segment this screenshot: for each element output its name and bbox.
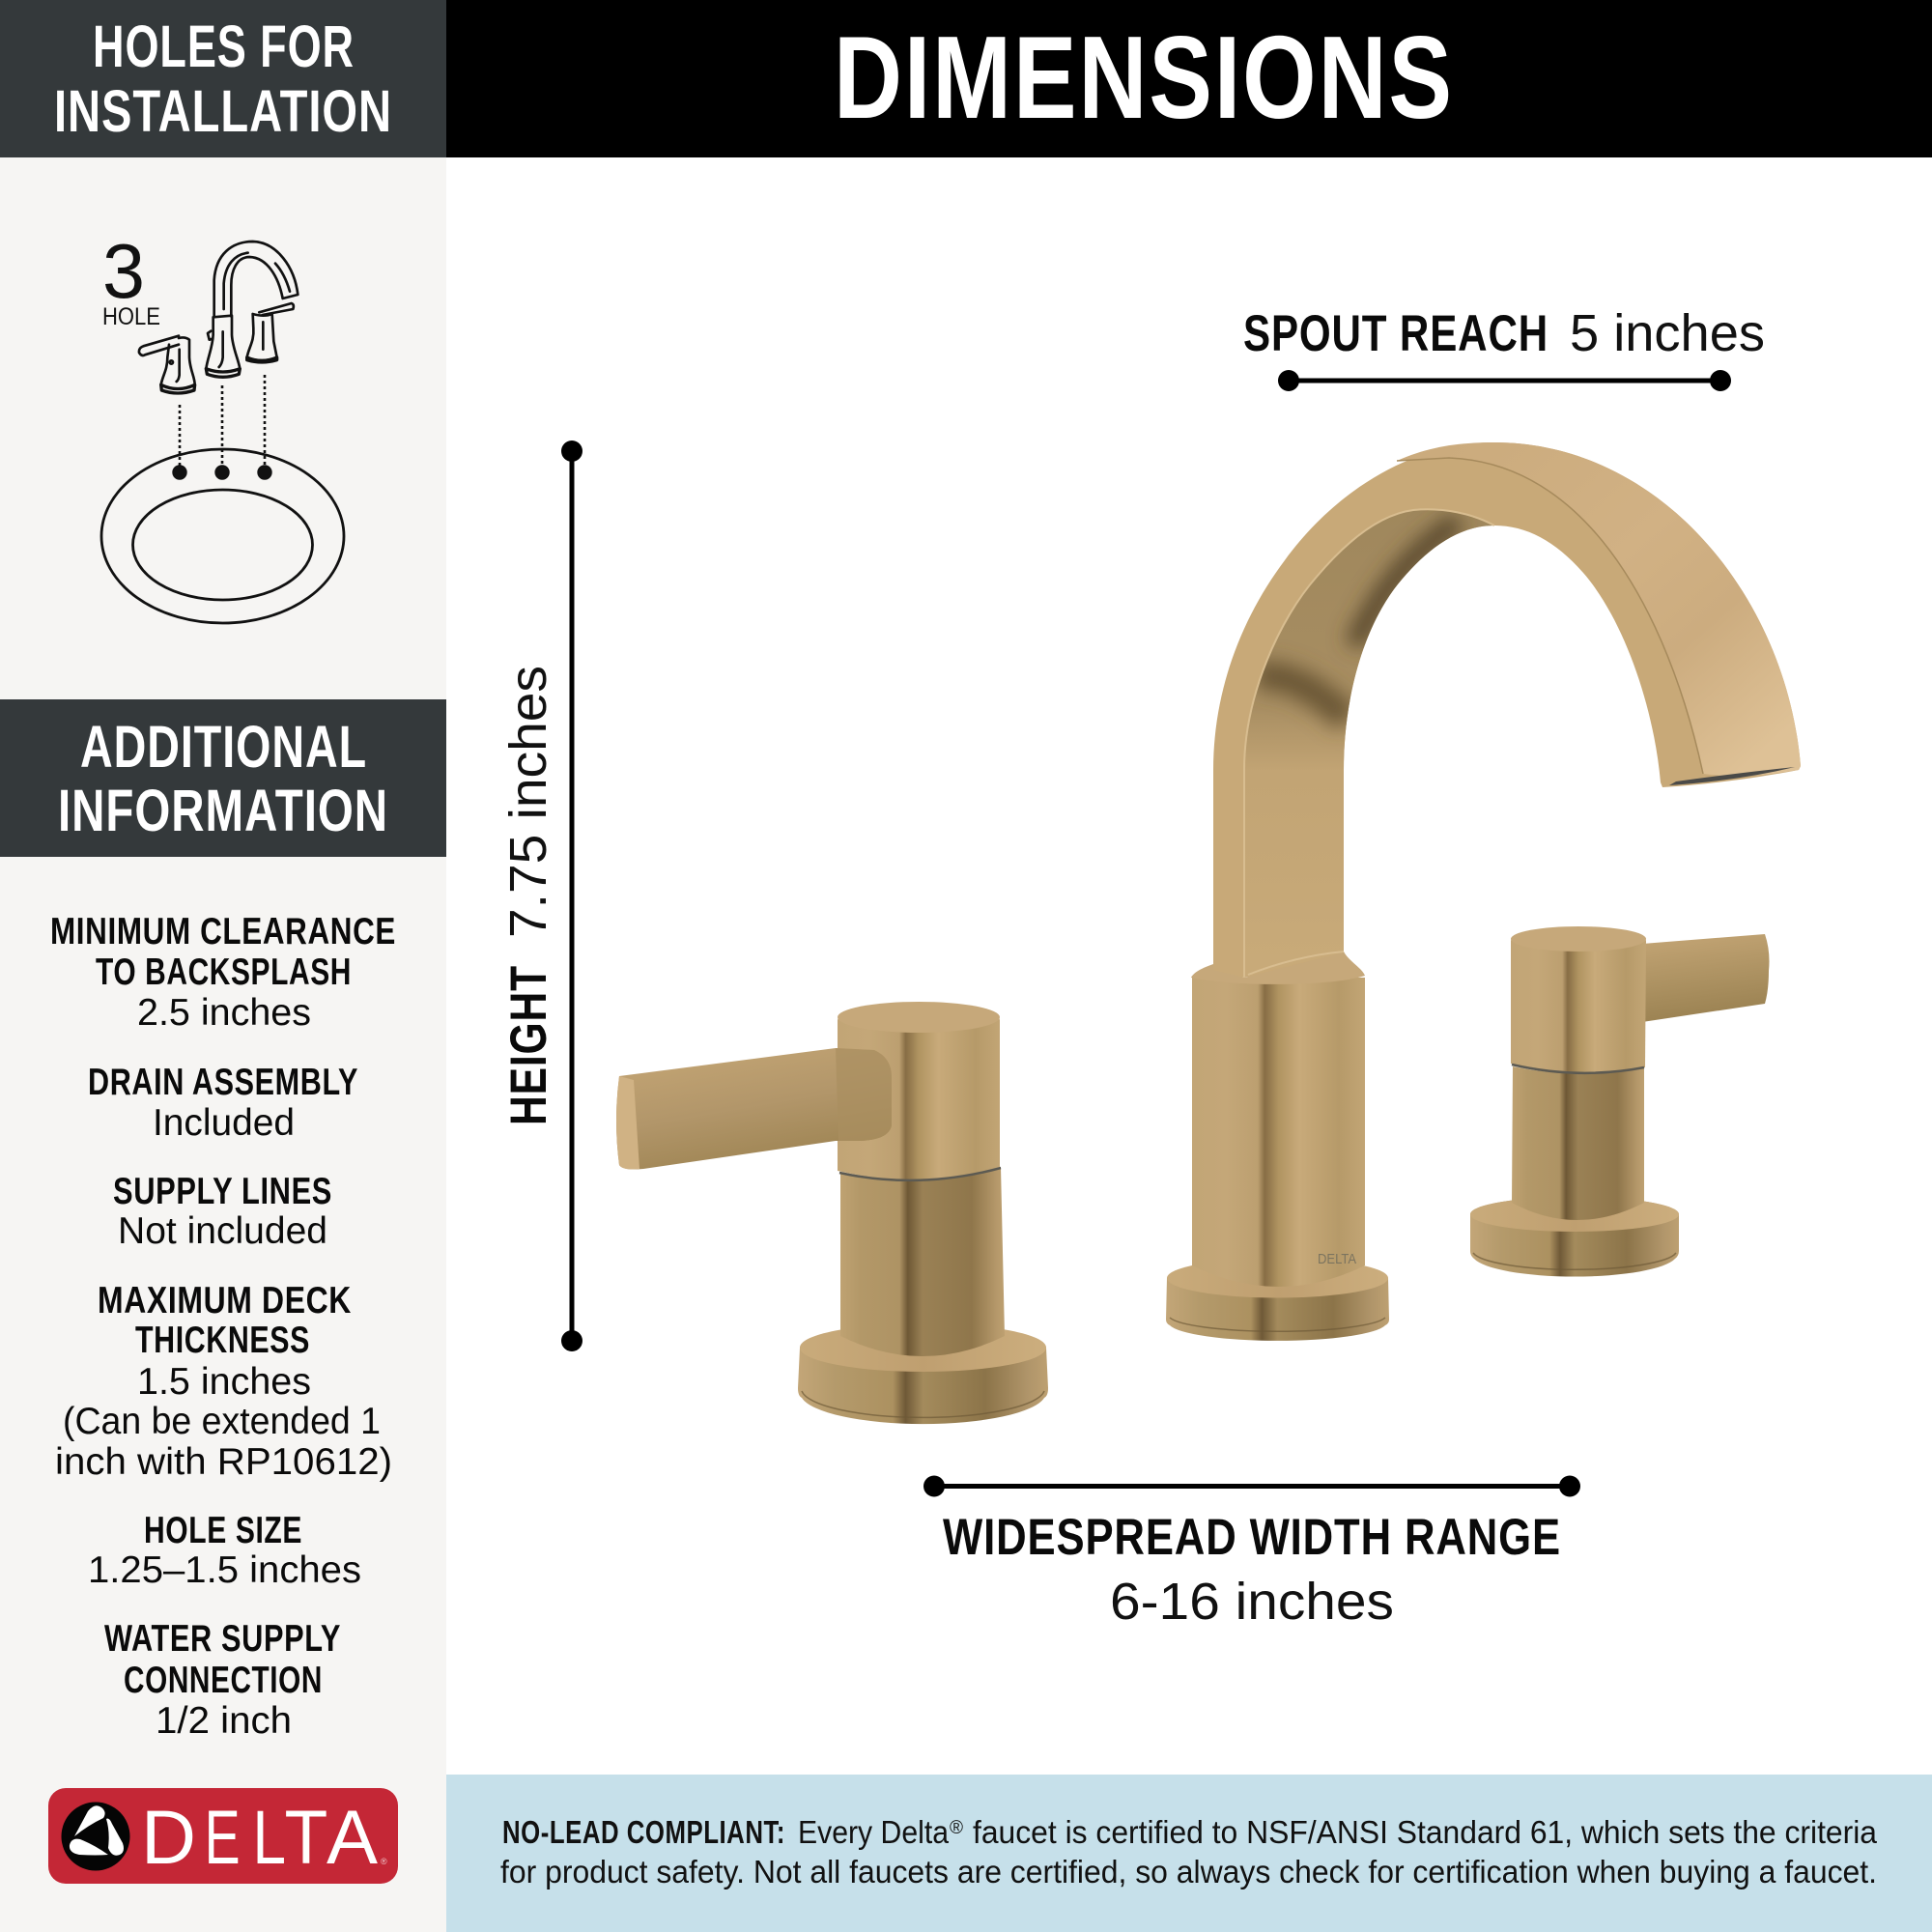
illustration: gold widespread faucet [616, 442, 1801, 1424]
faucet: left handle [616, 1002, 1048, 1424]
faucet: spout inner surface shading [1245, 510, 1493, 978]
faucet: center body shoulder [1191, 952, 1365, 984]
callout: no-lead compliant note: for product safety. Not all faucets are certified, so always check for certification when buying a faucet. [500, 1854, 1877, 1889]
spec: minimum clearance: MINIMUM CLEARANCE [50, 911, 396, 952]
arrow: spout reach dimension line [1278, 370, 1731, 391]
spec: maximum deck thickness: inch with RP10612) [55, 1441, 392, 1483]
logo: delta: ® [381, 1857, 387, 1866]
spec: maximum deck thickness: 1.5 inches [137, 1361, 311, 1403]
icon: small faucet line drawing [139, 242, 298, 393]
callout: no-lead compliant note: ® [950, 1818, 963, 1838]
sidebar background [0, 0, 446, 1932]
label: spout reach: 5 inches [1570, 304, 1765, 362]
label: 3 hole: 3 [102, 228, 145, 314]
label: spout reach: SPOUT REACH [1243, 305, 1548, 362]
spec: maximum deck thickness: THICKNESS [135, 1320, 310, 1361]
label: height: HEIGHT [500, 965, 557, 1125]
heading: holes for installation [0, 0, 446, 157]
wordmark: delta: L [253, 1794, 286, 1880]
spec: minimum clearance: TO BACKSPLASH [96, 952, 352, 993]
label: height [499, 666, 557, 1125]
spec: supply lines [113, 1171, 332, 1252]
spec: water supply connection: 1/2 inch [156, 1700, 292, 1742]
spec: maximum deck thickness: (Can be extended 1 [63, 1401, 381, 1442]
icon: 3 hole faucet and sink diagram [101, 228, 344, 623]
callout: no-lead compliant note: Every Delta [798, 1814, 950, 1850]
label: 3 hole [102, 228, 160, 330]
wordmark: delta [141, 1794, 378, 1880]
faucet: center body [1166, 952, 1389, 1341]
wordmark: delta: A [327, 1794, 378, 1880]
spec: hole size: HOLE SIZE [144, 1510, 302, 1551]
callout: no-lead compliant note: NO-LEAD COMPLIANT: [502, 1814, 785, 1850]
spec: water supply connection: WATER SUPPLY [104, 1618, 341, 1660]
heading: additional information [0, 699, 446, 857]
wordmark: delta: T [284, 1794, 327, 1880]
faucet: right lever [1642, 934, 1770, 1022]
arrow: height dimension line [561, 440, 582, 1351]
callout: no-lead compliant note [446, 1775, 1932, 1932]
arrow: widespread width dimension line [923, 1476, 1580, 1497]
icon: delta triangle petals [70, 1805, 124, 1856]
spec: supply lines: SUPPLY LINES [113, 1171, 332, 1212]
spec: maximum deck thickness [55, 1280, 392, 1483]
logo: delta [48, 1788, 398, 1884]
title: dimensions: DIMENSIONS [834, 12, 1454, 143]
spec: hole size [88, 1510, 361, 1591]
panel: additional information specs [50, 911, 396, 1742]
label: 3 hole: HOLE [102, 303, 160, 330]
spec: minimum clearance [50, 911, 396, 1034]
heading: additional information: ADDITIONAL [80, 714, 367, 780]
label: widespread width range: WIDESPREAD WIDTH RANGE [943, 1509, 1561, 1566]
callout: no-lead compliant note: faucet is certified to NSF/ANSI Standard 61, which sets the criteria [973, 1814, 1878, 1850]
heading: holes for installation: INSTALLATION [54, 78, 392, 144]
spec: supply lines: Not included [118, 1210, 327, 1252]
spec: hole size: 1.25–1.5 inches [88, 1549, 361, 1591]
title: dimensions [446, 0, 1932, 157]
spec: minimum clearance: 2.5 inches [137, 992, 311, 1034]
spec: water supply connection: CONNECTION [124, 1660, 323, 1701]
wordmark: delta: D [141, 1794, 196, 1880]
spec: water supply connection [104, 1618, 341, 1742]
spec: drain assembly: DRAIN ASSEMBLY [88, 1062, 358, 1103]
icon: sink with three holes [101, 375, 344, 623]
label: height: 7.75 inches [499, 666, 557, 938]
faucet: right handle [1470, 926, 1770, 1277]
spec: drain assembly [88, 1062, 358, 1144]
label: widespread width range: 6-16 inches [1110, 1573, 1394, 1631]
spec: drain assembly: Included [153, 1102, 295, 1144]
faucet: center body: DELTA [1318, 1251, 1356, 1267]
heading: additional information: INFORMATION [58, 778, 388, 843]
faucet: left lever [616, 1048, 892, 1169]
faucet: spout [1213, 442, 1801, 985]
label: widespread width range [943, 1509, 1561, 1631]
heading: holes for installation: HOLES FOR [93, 14, 355, 79]
spec: maximum deck thickness: MAXIMUM DECK [98, 1280, 352, 1321]
wordmark: delta: E [205, 1794, 241, 1880]
